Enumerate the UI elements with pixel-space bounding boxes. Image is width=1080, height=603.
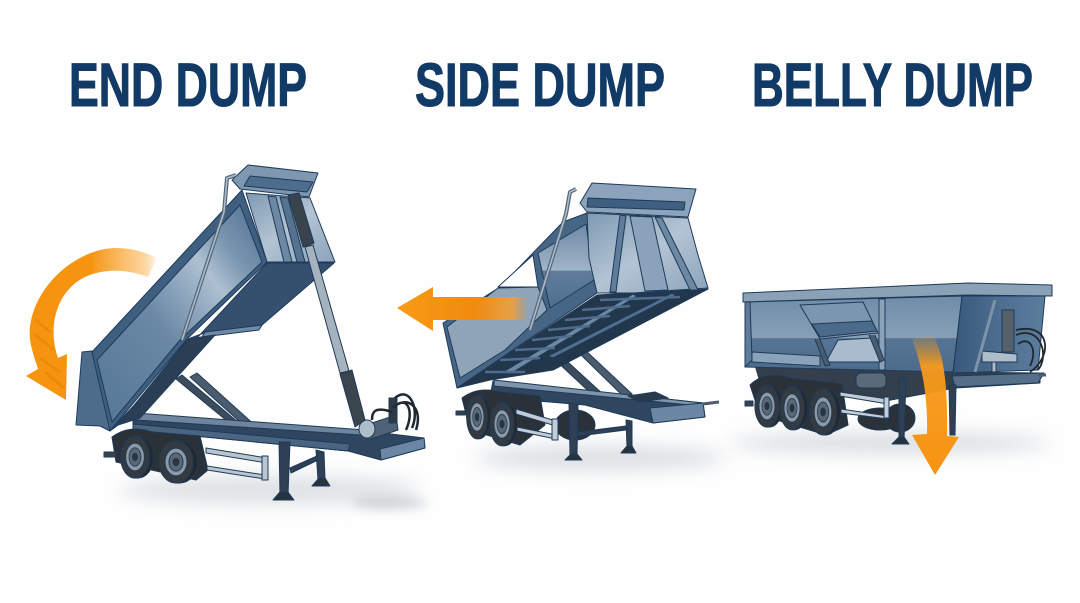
far wall panel, near lower panel <box>447 287 547 378</box>
chassis <box>755 365 1046 402</box>
tailgate <box>76 351 110 431</box>
body side wall <box>92 190 267 431</box>
body hopper side <box>745 296 962 372</box>
side guard rail <box>840 392 889 419</box>
landing legs <box>273 442 330 500</box>
main telescopic cylinder <box>288 193 365 427</box>
triple axle wheels <box>745 375 915 435</box>
wheels <box>456 390 595 446</box>
top rim <box>743 283 1052 302</box>
trailer: belly dump <box>743 283 1052 444</box>
body underside ribs <box>457 289 708 388</box>
side guard rail <box>516 409 558 440</box>
top canopy <box>232 165 318 197</box>
hydraulic ram and hoses <box>975 300 1045 372</box>
chassis frame <box>133 413 425 460</box>
front headboard <box>587 213 708 293</box>
arrow: belly dump down arrow <box>912 335 959 475</box>
landing legs <box>565 403 636 460</box>
dump body underside <box>110 263 334 431</box>
trailer: end dump <box>76 165 425 500</box>
body near wall <box>443 213 597 388</box>
arrow: side dump left arrow <box>397 287 528 331</box>
grab pipe <box>182 175 236 340</box>
lift rams under body <box>176 373 258 431</box>
arrow: end dump curved arrow <box>26 248 157 400</box>
open belly door <box>800 302 884 366</box>
top canopy <box>580 183 696 217</box>
ground shadows <box>120 433 1050 510</box>
title: SIDE DUMP: SIDE DUMP <box>415 51 665 119</box>
hydraulic pump and hoses <box>359 394 418 440</box>
body front end <box>953 296 1045 373</box>
chassis frame <box>490 380 719 423</box>
front headboard <box>246 193 335 262</box>
side guard rail <box>206 448 268 480</box>
trailer: side dump <box>443 183 719 460</box>
title: END DUMP: END DUMP <box>69 51 307 119</box>
landing legs <box>892 378 956 444</box>
wheels <box>104 429 208 483</box>
lift rams <box>553 350 632 400</box>
grab pipe <box>530 189 576 330</box>
